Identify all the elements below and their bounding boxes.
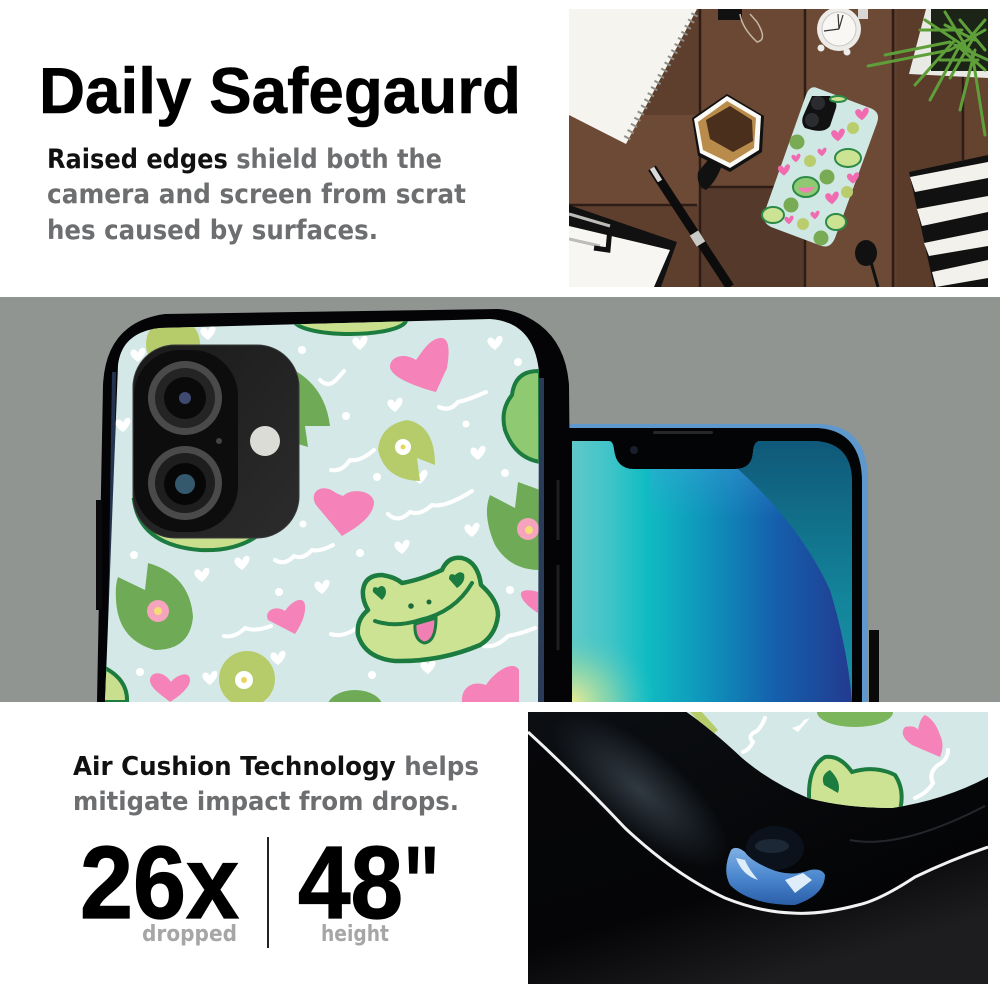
lily pad: olive bottom [219, 651, 275, 707]
edge sheen [529, 687, 751, 893]
wood planks [569, 9, 988, 287]
lily pad: right flower [487, 482, 540, 570]
white waves and dots [224, 371, 535, 646]
side button [869, 630, 879, 702]
stat: 26x dropped: 26x [80, 825, 239, 940]
notebook [569, 9, 697, 144]
text block: air cushion: Air Cushion Technology helps [73, 752, 479, 782]
mini lily pads [784, 134, 834, 246]
text block: raised edges: camera and screen from scrat [47, 179, 466, 210]
camera module [133, 345, 299, 538]
plant [868, 9, 988, 135]
pen [652, 168, 730, 287]
screen wallpaper [570, 438, 856, 704]
gray band [0, 297, 1000, 702]
hearts [150, 338, 538, 702]
lily pad: top left [146, 327, 200, 354]
title: Daily Safegaurd [39, 54, 521, 127]
lily pad: bottom [328, 690, 382, 702]
stat: 48 inches height: 48 [298, 825, 403, 940]
stat: 48 inches height: '' [405, 825, 438, 940]
white rim line [528, 732, 988, 913]
frog: bottom left [100, 668, 127, 702]
case edge [528, 712, 988, 913]
case artwork [105, 319, 539, 702]
text block: raised edges: hes caused by surfaces. [47, 215, 378, 246]
mini frogs [762, 96, 861, 230]
flash [250, 426, 280, 456]
lily pad: left flower [116, 563, 193, 650]
striped notebook [909, 155, 988, 287]
binder clip [718, 9, 762, 42]
phone: front screen [540, 424, 879, 704]
microphone [216, 438, 222, 444]
air cushion gel [726, 826, 825, 905]
text block: air cushion: mitigate impact from drops. [73, 787, 459, 817]
case frame [97, 309, 572, 702]
lens: top [148, 361, 222, 435]
lens: bottom [148, 446, 222, 520]
stat: 48 inches height: height [321, 922, 389, 947]
stat: 26x dropped: dropped [142, 922, 237, 947]
frog: main face [358, 558, 498, 661]
phone on desk [762, 87, 878, 246]
coffee cup [692, 94, 764, 190]
frog: right [504, 371, 540, 462]
photo: desk flat lay [569, 7, 988, 287]
highlight band [850, 806, 985, 842]
photo: air cushion close-up [528, 687, 990, 984]
phone: back with frog case [96, 306, 572, 726]
clock [817, 7, 868, 56]
mint artwork [680, 697, 990, 815]
clipboard [569, 205, 677, 287]
mini hearts [778, 108, 869, 224]
frog behind camera [134, 500, 265, 550]
lily pad: olive centre [378, 420, 435, 481]
lily pad: behind camera [296, 372, 330, 447]
frog: top [294, 321, 408, 336]
notch camera [630, 446, 638, 454]
text block: air cushion [73, 752, 479, 817]
spoon [855, 240, 878, 287]
text block: raised edges: Raised edges shield both the [47, 144, 442, 175]
text block: raised edges [47, 144, 466, 246]
